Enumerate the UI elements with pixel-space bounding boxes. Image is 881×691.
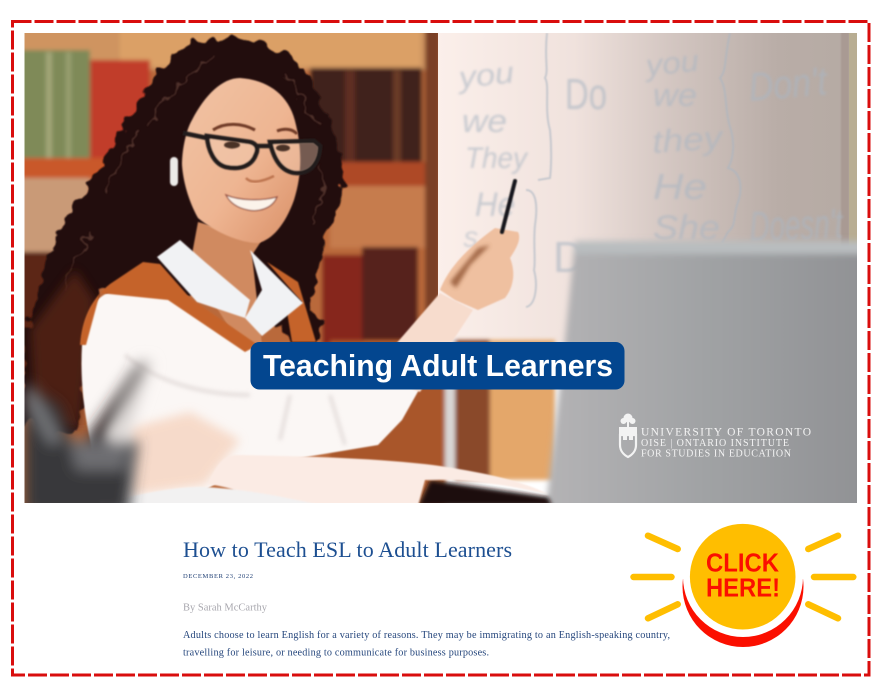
whiteboard handwriting: He	[475, 186, 515, 224]
hand	[440, 228, 519, 310]
University of Toronto logo: OISE | ONTARIO INSTITUTE	[641, 438, 789, 449]
whiteboard handwriting: D	[553, 233, 585, 282]
University of Toronto logo: UNIVERSITY OF TORONTO	[641, 426, 811, 438]
author: By Sarah McCarthy	[183, 602, 268, 614]
whiteboard handwriting: you	[642, 45, 701, 83]
button label: CLICK	[706, 550, 780, 578]
shirt shading	[130, 412, 240, 495]
whiteboard handwriting	[455, 45, 845, 282]
glasses	[183, 133, 320, 173]
lower background behind the book	[330, 340, 555, 480]
forearm	[392, 293, 473, 392]
intro paragraph: travelling for leisure, or needing to communicate for business purposes.	[183, 648, 489, 658]
whiteboard handwriting: they	[651, 119, 726, 160]
photo title banner: Teaching Adult Learners	[263, 348, 613, 383]
button disc	[690, 524, 796, 630]
eyebrows	[213, 124, 297, 134]
button rays	[634, 536, 853, 618]
University of Toronto logo: FOR STUDIES IN EDUCATION	[641, 448, 791, 459]
whiteboard braces	[526, 33, 740, 307]
button label: HERE!	[706, 574, 780, 602]
bookshelf background	[20, 28, 445, 508]
smile	[226, 195, 277, 211]
hair warm tint	[30, 270, 95, 430]
open book	[100, 455, 552, 506]
whiteboard handwriting: S	[463, 227, 478, 252]
intro paragraph	[183, 630, 670, 658]
hand shadow	[450, 245, 490, 288]
whiteboard handwriting: Do	[565, 70, 607, 119]
whiteboard	[438, 28, 863, 348]
whiteboard handwriting: He	[653, 166, 707, 207]
collar	[157, 240, 303, 336]
pen	[502, 181, 515, 232]
whiteboard handwriting: Don't	[747, 59, 830, 110]
click here button	[634, 517, 853, 647]
eyes	[224, 141, 240, 149]
hair	[24, 36, 344, 436]
face	[182, 78, 300, 243]
article text block	[183, 537, 670, 658]
article title: How to Teach ESL to Adult Learners	[183, 537, 512, 562]
shirt body and sleeve	[81, 292, 420, 503]
hair curl highlights	[62, 55, 325, 290]
date: DECEMBER 23, 2022	[183, 573, 253, 580]
button red crescent	[682, 579, 804, 647]
University of Toronto logo	[619, 414, 811, 459]
hero photo: teacher at whiteboard	[20, 28, 870, 515]
neck	[190, 222, 262, 345]
scarf	[80, 262, 316, 352]
teacher figure	[24, 36, 519, 503]
laptop screen back	[545, 241, 870, 515]
crest icon	[619, 414, 637, 457]
whiteboard handwriting: They	[465, 142, 529, 175]
whiteboard handwriting: you	[455, 56, 516, 95]
whiteboard handwriting: She	[653, 209, 720, 247]
button label	[706, 550, 780, 602]
nose	[246, 176, 274, 182]
shirt folds	[125, 355, 345, 445]
whiteboard handwriting: we	[653, 77, 697, 113]
earbud	[170, 157, 178, 186]
blurred pencil holder	[24, 360, 152, 515]
whiteboard handwriting: we	[462, 103, 507, 139]
intro paragraph: Adults choose to learn English for a variety of reasons. They may be immigrating to an English-speaking country,	[183, 630, 670, 641]
